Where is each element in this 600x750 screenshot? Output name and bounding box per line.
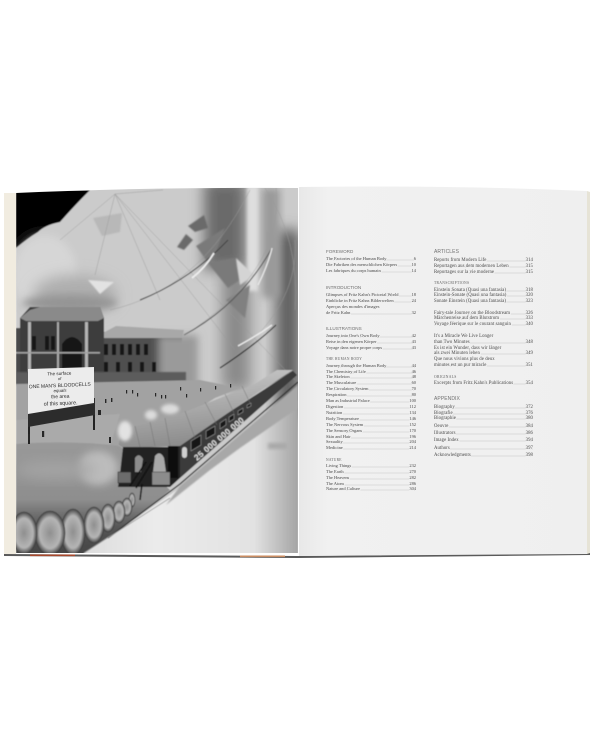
section: nature <box>326 458 417 491</box>
billboard text: of <box>58 376 62 381</box>
section: articles: ARTICLES <box>434 249 460 255</box>
section: the human body: 170 <box>409 428 417 433</box>
section: nature: 304 <box>409 486 417 491</box>
section: the human body: Sexuality <box>326 439 344 444</box>
section: transcriptions: als zwei Minuten leben <box>434 351 480 356</box>
illustration: globe, Milan square and blood-cell train <box>11 180 300 556</box>
section: appendix: Oeuvre <box>434 424 448 429</box>
section: transcriptions: Märchenreise auf dem Blutstrom <box>434 316 499 321</box>
cream page margin <box>4 193 16 554</box>
section: appendix: 380 <box>526 416 534 421</box>
billboard text: ONE MAN'S BLOODCELLS <box>29 382 92 390</box>
section: transcriptions: than Two Minutes <box>434 340 470 345</box>
right book page <box>299 186 590 556</box>
section: introduction: Glimpses of Fritz Kahn's Pictorial World <box>326 292 399 297</box>
section: transcriptions: 318 <box>526 288 534 293</box>
section: transcriptions: It's a Miracle We Live Longer <box>434 334 494 339</box>
billboard text: The surface <box>47 370 72 377</box>
dotted leaders <box>434 261 533 456</box>
section: nature: 282 <box>409 475 416 480</box>
globe grid lines <box>60 187 296 380</box>
section: transcriptions: Fairy-tale Journey on the Bloodstream <box>434 311 510 316</box>
billboard text: of this square. <box>44 400 78 408</box>
section: articles: 315 <box>526 270 534 275</box>
section: the human body: 60 <box>412 380 417 385</box>
section: originals: ORIGINALS <box>434 375 457 379</box>
section: the human body: 70 <box>412 386 417 391</box>
section: articles: 314 <box>526 258 534 263</box>
blood cell discs <box>11 493 135 555</box>
section: transcriptions: 340 <box>526 322 534 327</box>
section: appendix: Biography <box>434 405 455 410</box>
section: transcriptions: minutes est un pur miracle <box>434 363 486 368</box>
section: the human body: The Circulatory System <box>326 386 369 391</box>
section: articles: Reportagen aus dem modernen Leben <box>434 264 509 269</box>
section: foreword: 14 <box>412 268 417 273</box>
train <box>118 370 297 500</box>
section: introduction: INTRODUCTION <box>326 285 361 290</box>
section: originals <box>434 375 534 386</box>
section: transcriptions: 320 <box>526 293 534 298</box>
section: the human body: The Nervous System <box>326 422 364 427</box>
section: nature: The Atom <box>326 481 344 486</box>
section: appendix: Biographie <box>434 416 456 421</box>
section: appendix: Authors <box>434 446 450 451</box>
section: appendix <box>434 396 534 458</box>
section: illustrations <box>326 326 417 350</box>
section: transcriptions: Einstein-Sonate (Quasi una fantasia) <box>434 293 507 298</box>
section: nature: 286 <box>409 481 417 486</box>
section: originals: 354 <box>526 381 534 386</box>
section: introduction <box>326 285 417 315</box>
white road <box>80 400 298 556</box>
section: the human body: Journey through the Human Body <box>326 363 387 368</box>
carriage roof <box>119 370 293 448</box>
Galleria building <box>16 307 198 390</box>
billboard text: equals <box>53 388 67 393</box>
billboard text: the area <box>51 394 70 400</box>
section: the human body: 204 <box>409 439 417 444</box>
page sheet <box>299 186 587 556</box>
section: nature: 232 <box>409 463 416 468</box>
section: the human body: 214 <box>409 445 417 450</box>
section: the human body: Medicine <box>326 445 343 450</box>
section: appendix: 397 <box>526 446 534 451</box>
square <box>16 380 240 446</box>
section: transcriptions: 349 <box>526 351 534 356</box>
globe <box>16 186 300 556</box>
black sky <box>16 190 90 248</box>
section: transcriptions: 333 <box>526 316 534 321</box>
section: the human body: 46 <box>412 369 417 374</box>
section: the human body: 112 <box>410 404 416 409</box>
section: transcriptions: Einstein Sonata (Quasi una fantasia) <box>434 288 506 293</box>
section: transcriptions: 323 <box>526 299 534 304</box>
contents: right column <box>434 249 534 458</box>
section: illustrations: Journey into One's Own Body <box>326 333 380 338</box>
continents <box>93 213 254 318</box>
section: foreword: The Factories of the Human Body <box>326 256 387 261</box>
section: the human body: 44 <box>412 363 417 368</box>
section: articles: 315 <box>526 264 534 269</box>
section: foreword: 10 <box>412 262 417 267</box>
dotted leaders <box>326 260 416 490</box>
section: the human body: 48 <box>412 374 417 379</box>
section: the human body: Skin and Hair <box>326 434 351 439</box>
contents: left column <box>326 249 417 491</box>
section: appendix: 376 <box>526 411 534 416</box>
section: the human body: 100 <box>409 398 417 403</box>
section: the human body: 80 <box>412 392 417 397</box>
section: originals: Excerpts from Fritz Kahn's Publications <box>434 381 513 386</box>
section: transcriptions: Que nous vivions plus de deux <box>434 357 495 362</box>
section: transcriptions: 351 <box>526 363 534 368</box>
clouds <box>13 235 118 315</box>
section: introduction: Einblicke in Fritz Kahns Bilderwelten <box>326 298 394 303</box>
globe shading <box>204 180 300 420</box>
section: nature: 270 <box>409 469 417 474</box>
road shadow <box>166 385 298 505</box>
section: the human body: The Skeleton <box>326 374 350 379</box>
people in square <box>28 384 231 443</box>
billboard text <box>29 372 90 406</box>
section: foreword: Les fabriques du corps humain <box>326 268 381 273</box>
section: transcriptions: 348 <box>526 340 534 345</box>
section: nature: Nature and Culture <box>326 486 360 491</box>
section: appendix: Biografie <box>434 411 453 416</box>
section: appendix: 384 <box>526 424 534 429</box>
bright latitude bands <box>140 240 276 368</box>
section: articles: Reports from Modern Life <box>434 258 486 263</box>
section: appendix: APPENDIX <box>434 396 461 402</box>
section: nature: Living Things <box>326 463 351 468</box>
section: articles <box>434 249 534 275</box>
section: nature: The Heavens <box>326 475 350 480</box>
section: the human body: Nutrition <box>326 410 343 415</box>
rear platform with two figures <box>118 446 180 487</box>
section: transcriptions: Sonate Einstein (Quasi una fantasia) <box>434 299 506 304</box>
section: articles: Reportages sur la vie moderne <box>434 270 494 275</box>
section: introduction: de Fritz Kahn <box>326 310 351 315</box>
section: illustrations: Voyage dans notre propre corps <box>326 345 382 350</box>
section: appendix: 372 <box>526 405 534 410</box>
section: transcriptions: TRANSCRIPTIONS <box>434 281 469 285</box>
steam <box>118 421 132 441</box>
section: transcriptions: Es ist ein Wunder, dass wir länger <box>434 346 502 351</box>
section: transcriptions <box>434 281 534 368</box>
section: the human body: THE HUMAN BODY <box>326 357 362 361</box>
section: the human body: Digestion <box>326 404 344 409</box>
section: illustrations: ILLUSTRATIONS <box>326 326 362 331</box>
section: the human body: 134 <box>409 410 417 415</box>
section: the human body: 196 <box>409 434 417 439</box>
section: appendix: Illustrators <box>434 431 456 436</box>
section: the human body: Body Temperature <box>326 416 359 421</box>
section: the human body: Respiration <box>326 392 347 397</box>
section: the human body <box>326 357 417 450</box>
section: appendix: 398 <box>526 453 534 458</box>
section: appendix: 394 <box>526 438 534 443</box>
carriage windows <box>191 403 251 451</box>
section: introduction: 18 <box>412 292 417 297</box>
section: illustrations: 43 <box>412 345 417 350</box>
section: the human body: The Sensory Organs <box>326 428 362 433</box>
section: transcriptions: Voyage féerique sur le courant sanguin <box>434 322 511 327</box>
section: the human body: 152 <box>409 422 416 427</box>
book cover edge shadow <box>4 553 590 558</box>
section: foreword <box>326 249 417 273</box>
section: illustrations: 43 <box>412 339 417 344</box>
section: illustrations: Reise in den eigenen Körper <box>326 339 377 344</box>
section: the human body: Man as Industrial Palace <box>326 398 370 403</box>
section: the human body: The Musculature <box>326 380 356 385</box>
left book page <box>4 180 300 556</box>
billboard <box>28 367 95 444</box>
section: nature: NATURE <box>326 458 342 462</box>
section: the human body: 146 <box>409 416 417 421</box>
section: foreword: Die Fabriken des menschlichen Körpers <box>326 262 397 267</box>
mist and road bed <box>16 442 170 556</box>
train number: 25 000 000 000 <box>192 415 246 463</box>
section: foreword: 6 <box>414 256 417 261</box>
section: introduction: 24 <box>412 298 417 303</box>
section: appendix: 386 <box>526 431 534 436</box>
page edge <box>587 191 590 554</box>
section: transcriptions: 326 <box>526 311 534 316</box>
section: foreword: FOREWORD <box>326 249 354 254</box>
section: the human body: The Chemistry of Life <box>326 369 366 374</box>
section: nature: The Earth <box>326 469 344 474</box>
section: appendix: Acknowledgments <box>434 453 471 458</box>
section: introduction: 32 <box>412 310 416 315</box>
section: introduction: Aperçus des mondes d'images <box>326 304 380 309</box>
section: illustrations: 42 <box>412 333 416 338</box>
section: appendix: Image Index <box>434 438 459 443</box>
carriage body <box>178 371 297 478</box>
